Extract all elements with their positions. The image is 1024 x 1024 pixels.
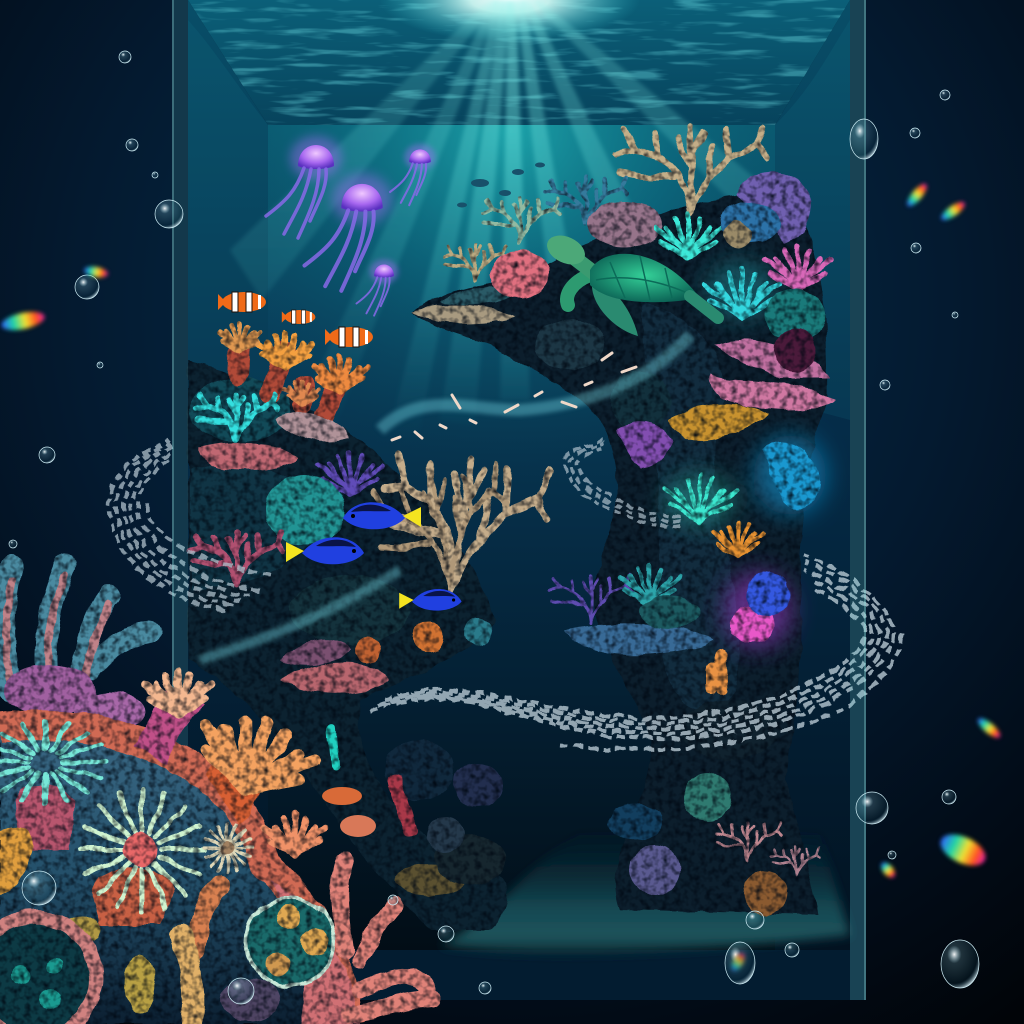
blue glow [746,573,790,617]
tank glass pillars [172,0,866,1000]
orange coral [713,522,763,556]
jellyfish large left [266,136,342,238]
turtle rear flipper [690,296,718,318]
pink plate [198,443,298,470]
orange cup stems [238,345,340,415]
purple plate coral [735,171,812,245]
gold plate coral [668,404,768,441]
lilac textured patch [220,978,280,1022]
jellyfish small lower [356,260,398,316]
glowing current stream [200,335,690,660]
pink finger corals [339,860,432,1015]
tan branch coral second layer [365,465,519,597]
turtle shell [590,254,700,302]
small distant fish [457,162,545,208]
magenta branch coral [765,246,831,290]
left reef mass [188,360,507,930]
panel: glass tank interior [172,0,866,1000]
blue ledge [565,623,712,656]
blue tube corals [5,565,150,700]
purple polyps [5,665,95,715]
pink ring polyp [0,910,103,1024]
orange cup anemone left [219,324,261,352]
tan small coral [482,198,560,242]
tan left coral [445,245,507,280]
shell [743,871,787,915]
orange cup anemone small [284,381,320,405]
water surface glow [380,0,640,42]
turtle front flipper [567,275,590,305]
neon glows behind right reef corals [664,260,826,648]
yellow finger coral [182,935,193,1024]
pink ridge [0,725,350,1024]
blue tang fish [286,502,462,611]
light rays [230,0,775,480]
blue manta shape [607,804,663,840]
dark pink branch coral [190,532,284,585]
pink bottom coral [716,823,782,860]
glowing blue ruffle [762,442,820,509]
dark berry cluster [774,329,816,371]
violet coral [317,451,383,495]
small white anemone [204,824,252,872]
pink tentacle anemone upper [135,690,205,765]
clownfish group [218,292,373,347]
pink plates [715,340,832,378]
jellyfish large centre [304,174,392,291]
cyan anemone top [655,214,721,258]
fish school: lower sweeping swirl [370,556,903,749]
violet fan coral [550,576,632,622]
turtle head [542,230,590,270]
blue sponge [720,202,780,242]
orange cluster [413,622,443,652]
right reef corals [445,126,835,915]
left reef corals [190,324,555,896]
tan branch coral [372,448,555,602]
cyan coral [705,268,779,318]
pink bottom coral 2 [771,848,820,875]
rock teal cluster [640,596,700,628]
tan knob coral [724,221,752,249]
orange cup anemones [258,332,312,368]
lower rocks [385,740,455,800]
blue fan coral [545,178,627,224]
purple ruffle [618,421,672,470]
turtle neck [572,256,598,276]
yellow oval polyps [62,916,102,944]
white green anemone [90,868,175,925]
mauve plate [275,413,350,441]
teal sponge [464,618,492,646]
teal cluster [620,565,680,605]
green boulder [684,773,732,821]
foreground coral [0,565,432,1024]
teal rock [765,289,825,341]
right reef column [412,190,828,915]
small orange anemone [265,815,325,855]
fish school: upper right swirl [565,440,680,528]
pink coral [490,250,550,298]
teal glow fan [664,474,736,522]
glow cyan tube [332,730,335,765]
orange anemone [205,751,270,825]
orange reef fish [322,787,376,837]
jellyfish group [266,136,436,316]
main coral body [0,720,355,1024]
purple bottom ring [630,845,680,895]
turtle shell markings [596,256,694,300]
pink tube centres [6,575,110,690]
water surface ripples [188,0,850,125]
orange cup anemone right [313,356,367,392]
fish school: left swirl [109,440,270,610]
red coral [395,780,410,830]
teal anemone [15,785,75,850]
pink ledge coral [280,663,388,693]
magenta glow [730,607,774,643]
rainbow prism flares [0,181,1003,973]
orange finger corals [195,885,220,950]
teal brain coral [265,475,345,545]
brain coral top [588,201,662,247]
jellyfish small top [390,144,436,205]
orange tubes [712,655,722,690]
glass sphere with polyps [246,898,334,986]
turtle second flipper [592,280,638,336]
reef floor [440,835,850,954]
cyan coral [196,394,278,440]
tan branch coral top [616,126,768,212]
small white fish in the stream [392,353,636,440]
sea turtle [542,230,718,336]
pink ridge lower wedge [270,880,360,1024]
